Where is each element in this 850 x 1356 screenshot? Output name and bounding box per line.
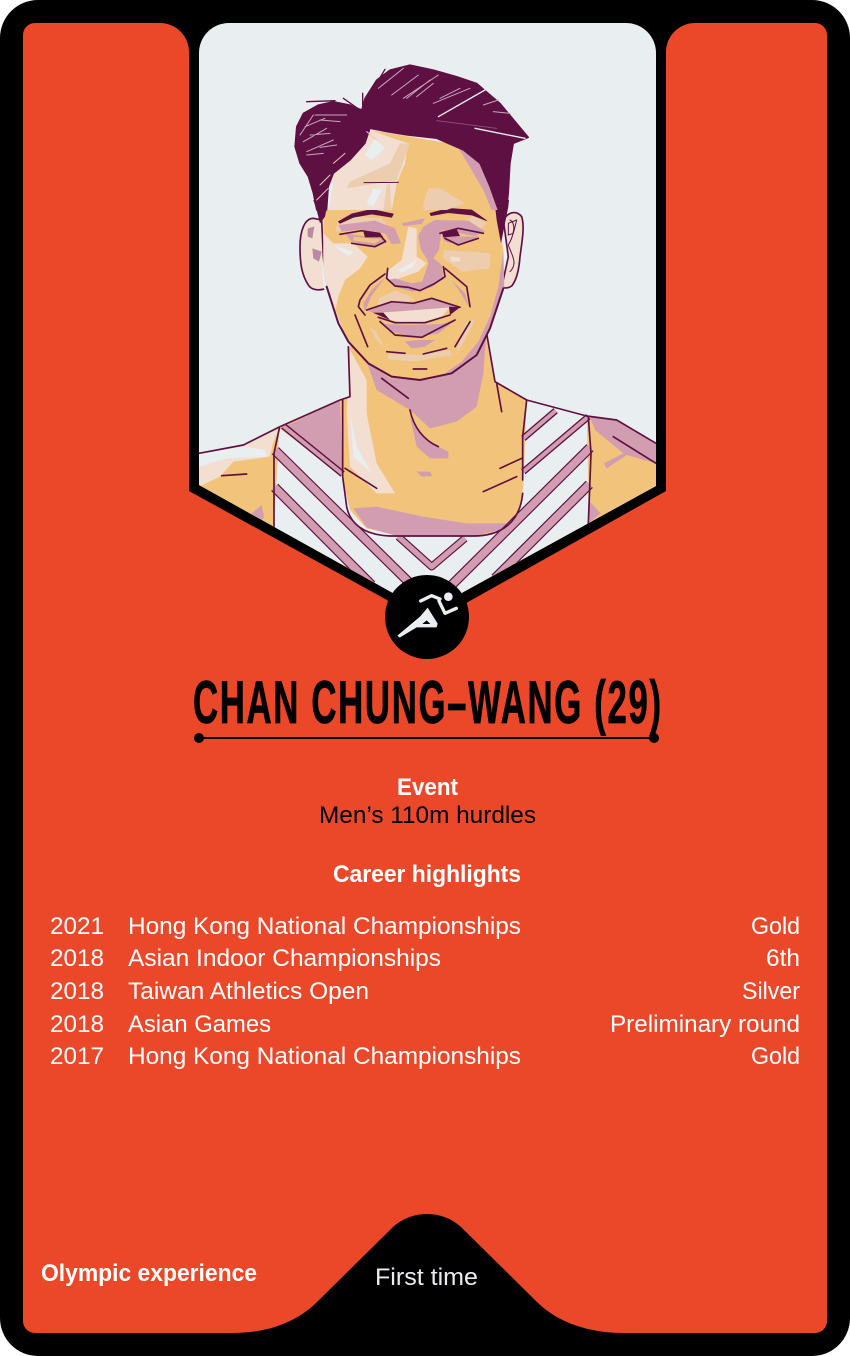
singlet edges [274, 400, 591, 528]
stray hairs [307, 69, 385, 110]
singlet base [274, 401, 590, 593]
torso [199, 334, 656, 593]
row 2018 Asian Games: Asian Games [128, 1011, 271, 1038]
left face highlight [323, 233, 368, 312]
temple shadow [457, 145, 498, 210]
cheek glare [334, 245, 353, 256]
event heading: Event [397, 774, 458, 801]
forehead highlight [323, 130, 408, 210]
hair parting streak [438, 90, 525, 138]
jaw glare [322, 257, 342, 328]
forehead glare [323, 138, 385, 210]
left socket shadow [338, 221, 401, 247]
neck glare [351, 417, 372, 473]
row 2018 Asian Games [50, 1011, 800, 1038]
icon: hurdler [397, 592, 456, 638]
career highlights table [50, 913, 800, 1070]
left ear [300, 218, 327, 290]
right shoulder shadow [590, 417, 656, 468]
right socket shadow [418, 220, 485, 258]
nose glare [398, 260, 417, 273]
lower shoulder shadows [252, 502, 600, 522]
event name: Men’s 110m hurdles [319, 802, 536, 829]
neck under-chin shadow [367, 337, 486, 428]
portrait panel [199, 23, 656, 612]
row 2018 indoor: 6th [766, 945, 800, 972]
brow crease [364, 181, 398, 184]
chest collar shadow [353, 507, 507, 536]
hair fringe [317, 132, 377, 200]
sport badge [385, 575, 469, 659]
cheek glint [450, 257, 460, 262]
left shoulder highlight [199, 428, 279, 487]
chin highlight [370, 320, 475, 362]
row 2018 Asian Games: Preliminary round [610, 1011, 800, 1038]
face outline [327, 287, 503, 380]
facial linework [340, 228, 483, 369]
Olympic experience value: First time [375, 1264, 478, 1291]
row 2018 indoor: 2018 [50, 945, 104, 972]
row 2021: 2021 [50, 913, 104, 940]
row 2018 indoor [50, 945, 800, 972]
row 2018 Taiwan: Taiwan Athletics Open [128, 978, 369, 1005]
hair crease [437, 121, 497, 128]
torso and neck skin [199, 338, 656, 593]
lower lip [377, 317, 456, 337]
irises [363, 229, 460, 237]
nose underside [388, 278, 442, 292]
row 2017: Hong Kong National Championships [128, 1043, 521, 1070]
left ear detail [308, 227, 322, 262]
brows [338, 208, 487, 223]
career highlights heading: Career highlights [333, 861, 521, 888]
temple hair right [494, 200, 509, 243]
title underline [194, 733, 659, 743]
row 2017 [50, 1043, 800, 1070]
badge disc [385, 575, 469, 659]
nasolabial shadows [363, 277, 469, 312]
row 2021: Gold [751, 913, 800, 940]
nose highlight [387, 227, 427, 280]
row 2021 [50, 913, 800, 940]
forehead midtone [347, 143, 465, 210]
singlet stripes [275, 411, 590, 588]
hair highlights [300, 68, 510, 155]
row 2017: 2017 [50, 1043, 104, 1070]
mouth corners [373, 307, 460, 320]
upper lip [367, 298, 460, 312]
nose right shadow [419, 232, 444, 282]
title: athlete name: CHAN CHUNG–WANG (29) [193, 670, 661, 736]
sideburn left [313, 200, 328, 223]
above-lip highlight [378, 291, 415, 306]
face base [323, 130, 503, 380]
body linework [199, 333, 656, 536]
face [300, 130, 523, 380]
row 2018 Taiwan [50, 978, 800, 1005]
left shoulder glare [199, 447, 267, 467]
teeth [382, 307, 450, 323]
cheek patch [443, 250, 490, 272]
brow bone [335, 215, 487, 232]
nose bridge shading [402, 218, 425, 226]
neck shadow details [410, 417, 448, 477]
right ear [502, 213, 523, 288]
Olympic experience label: Olympic experience [41, 1260, 257, 1287]
hair mass [295, 65, 528, 210]
left lower lid [353, 237, 381, 243]
row 2018 Taiwan: 2018 [50, 978, 104, 1005]
right ear detail [508, 220, 517, 272]
row 2018 Taiwan: Silver [742, 978, 800, 1005]
chin shadow [405, 340, 435, 348]
neck highlight [347, 350, 395, 493]
row 2021: Hong Kong National Championships [128, 913, 521, 940]
row 2018 Asian Games: 2018 [50, 1011, 104, 1038]
left neck shadow [288, 401, 342, 476]
hair and forehead [295, 65, 528, 210]
portrait illustration [199, 64, 656, 593]
row 2018 indoor: Asian Indoor Championships [128, 945, 441, 972]
row 2017: Gold [751, 1043, 800, 1070]
right jaw shadow [445, 250, 504, 373]
